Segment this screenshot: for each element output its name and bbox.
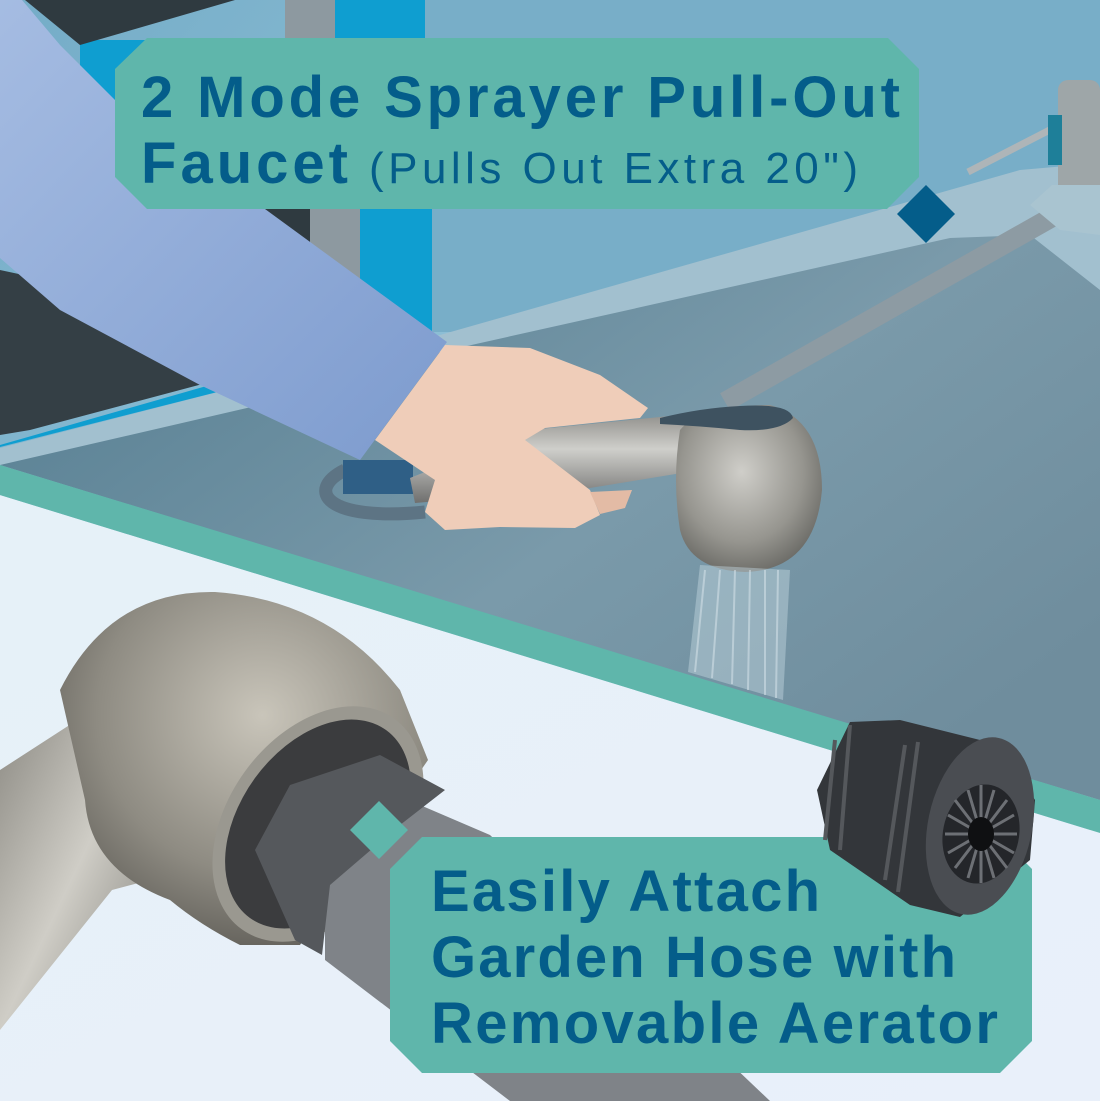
sprayer hose: [326, 190, 1100, 514]
sprayer close-up: [0, 592, 770, 1101]
callout marker: bottom diamond: [350, 801, 408, 859]
removable aerator: [817, 720, 1050, 925]
callout: top heading: Faucet: [141, 131, 348, 196]
callout: bottom heading: Removable Aerator: [431, 991, 998, 1056]
callout: top heading: [115, 38, 919, 209]
callout: bottom heading: Easily Attach: [431, 859, 820, 924]
lower panel: [0, 495, 1100, 1101]
background: photo of sink: [0, 0, 1100, 830]
faucet base: [968, 80, 1100, 235]
arm in blue sweater: [0, 0, 447, 460]
pull-out sprayer in hand: [375, 345, 822, 572]
water spray: [688, 565, 790, 700]
callout: bottom heading: Garden Hose with: [431, 925, 956, 990]
callout: top heading: (Pulls Out Extra 20"): [369, 144, 858, 193]
callout: bottom heading: [390, 837, 1032, 1073]
callout marker: top diamond: [897, 185, 955, 243]
diagonal teal band: [0, 465, 1100, 833]
callout: top heading: 2 Mode Sprayer Pull-Out: [141, 65, 900, 130]
